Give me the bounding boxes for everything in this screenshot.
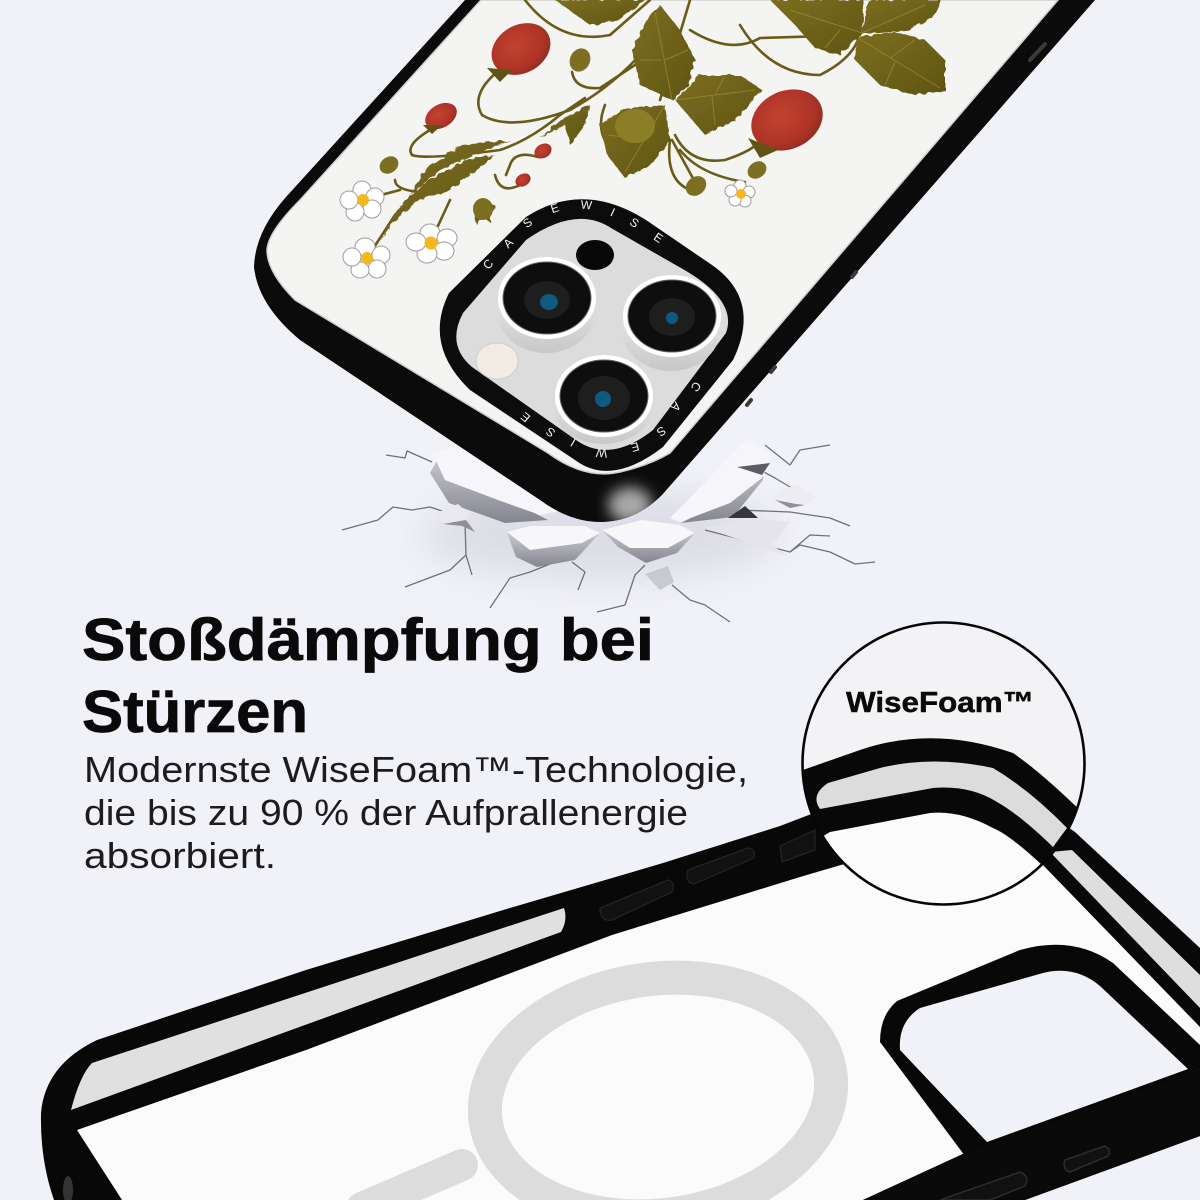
heading [82,607,654,745]
brand ring text: I [608,205,617,219]
buds [376,45,770,220]
foam strip: right [1050,850,1200,1008]
rock chunk: right middle [602,520,695,563]
lens: top left [497,257,596,353]
camera island [440,198,744,471]
magnified frame corner [804,738,1076,864]
WiseFoam zoom callout [801,621,1086,906]
reflection on corner [608,487,652,523]
magnet alignment pill [362,1165,462,1200]
brand ring text: W [580,198,593,213]
black frame silhouette [41,780,1200,1200]
brand ring text: I [568,436,578,449]
body text: absorbiert. [84,835,276,876]
body text: Modernste WiseFoam™-Technologie, [84,749,748,790]
camera cut-out [880,945,1200,1156]
brand ring text: C [480,256,496,272]
top phone with strawberry case [254,0,1095,523]
rock chunk: lower middle [507,526,600,567]
rock chunk: upper right [670,440,770,523]
strawberries [421,13,833,189]
callout label: WiseFoam™ [846,687,1034,719]
brand ring text: E [629,439,641,455]
crack wedge [705,518,790,556]
bottom frame band [863,1069,1200,1200]
leaf veins [608,5,940,172]
stems [362,0,860,258]
rock chunk: small bottom [645,566,674,590]
clear back panel [77,830,1200,1200]
lens: bottom [554,355,653,444]
charging port notch [63,1176,73,1200]
crack lines [342,445,875,622]
strawberry illustration [340,0,945,278]
cracked ground impact [342,440,875,622]
leaves [380,0,945,240]
island black bumper [440,199,744,471]
brand ring text: E [549,200,561,216]
rock chunk: small left [436,504,475,532]
camera plateau [456,219,728,450]
brand ring text: C [688,379,704,395]
foam strip: top [71,908,565,1110]
bottom edge buttons [940,1146,1109,1200]
case back white panel [267,0,1058,474]
flowers [340,180,755,278]
lens: right [622,275,721,371]
brand ring text: S [654,423,669,439]
side buttons top [600,830,815,920]
brand ring text: W [595,445,608,460]
brand ring text: A [500,235,516,251]
brand ring text: E [518,409,533,425]
rock chunk: small right [772,484,817,508]
lidar sensor [576,240,614,270]
brand ring text: A [668,399,684,414]
brand ring text: S [543,424,558,440]
unripe berry [615,109,655,143]
crack shadow [420,490,780,580]
flash [476,343,518,379]
side button marks [747,44,1045,405]
brand ring text [480,198,704,460]
brand ring text: E [651,230,666,246]
heading: Stoßdämpfung bei [82,607,654,673]
case outer black frame [254,0,1095,522]
rock chunk: upper left [430,445,565,523]
bottom phone case inside view [41,780,1200,1200]
callout disc [802,622,1084,904]
heading: Stürzen [82,679,308,745]
magnet ring [469,956,847,1200]
brand ring text: S [627,215,642,231]
body text: die bis zu 90 % der Aufprallenergie [84,792,688,833]
callout ring [802,622,1084,904]
brand ring text: S [520,215,535,231]
body text [84,749,748,876]
